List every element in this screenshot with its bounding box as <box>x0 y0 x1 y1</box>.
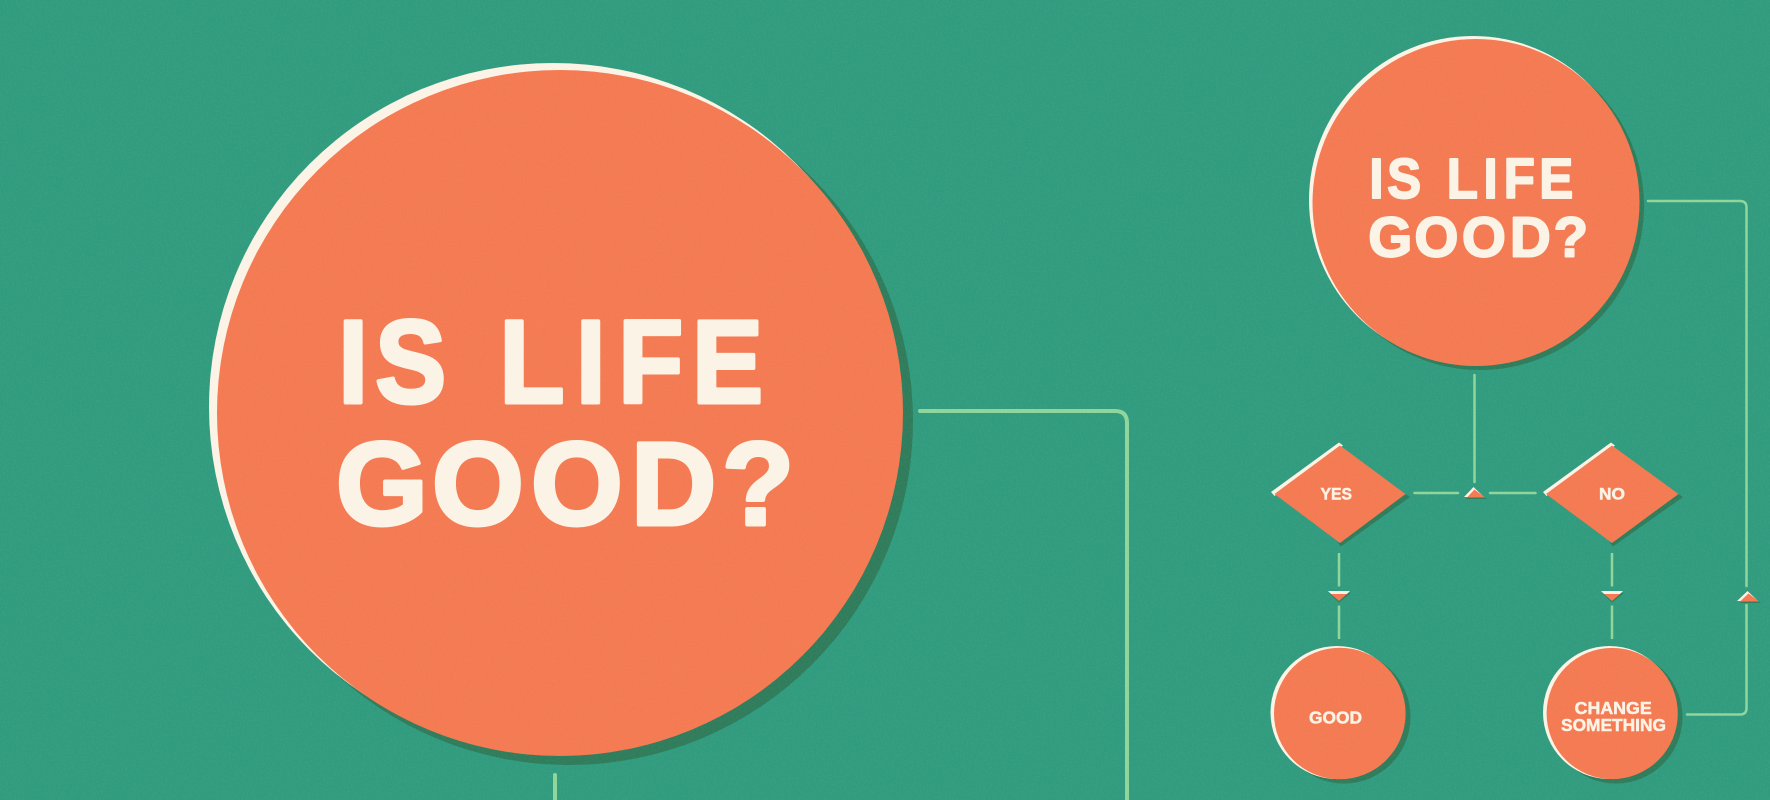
label: no: NO <box>1599 484 1625 504</box>
label: good: GOOD <box>1309 708 1362 728</box>
small circle: is life good <box>1309 36 1644 370</box>
heading: is life good, small: GOOD? <box>1368 207 1588 270</box>
connector: split to yes <box>1414 492 1458 494</box>
outcome circle: good <box>1270 646 1410 784</box>
connector: large circle downward <box>553 775 557 800</box>
outcome circle: change something <box>1543 646 1682 784</box>
arrow: up, centre split <box>1464 487 1487 499</box>
arrow: down, no branch <box>1601 591 1624 602</box>
connector: yes to good <box>1338 553 1340 639</box>
connector: change something loops back to top <box>1687 605 1746 714</box>
connector: large circle to right <box>920 411 1127 800</box>
connector: feedback loop to top circle <box>1648 201 1746 586</box>
heading: is life good, large: IS LIFE <box>338 295 763 428</box>
heading: is life good, small: IS LIFE <box>1369 148 1573 211</box>
label: change something: SOMETHING <box>1561 715 1666 735</box>
heading: is life good, large <box>336 295 794 550</box>
label: change something: CHANGE <box>1575 698 1652 718</box>
label: yes: YES <box>1320 484 1352 504</box>
connector: split to no <box>1490 492 1536 494</box>
connector: no to change something <box>1611 553 1613 639</box>
panel: complete flowchart <box>1270 36 1761 784</box>
arrow: down, yes branch <box>1328 591 1351 602</box>
decision diamond: yes <box>1271 442 1410 546</box>
decision diamond: no <box>1543 442 1683 546</box>
heading: is life good, large: GOOD? <box>336 418 794 550</box>
large circle: is life good <box>209 63 913 765</box>
panel: large zoomed flowchart detail <box>209 63 1127 800</box>
arrow: up, feedback loop <box>1737 591 1761 603</box>
label: change something <box>1561 698 1666 735</box>
connector: top circle to decision <box>1473 375 1476 482</box>
heading: is life good, small <box>1368 148 1588 270</box>
